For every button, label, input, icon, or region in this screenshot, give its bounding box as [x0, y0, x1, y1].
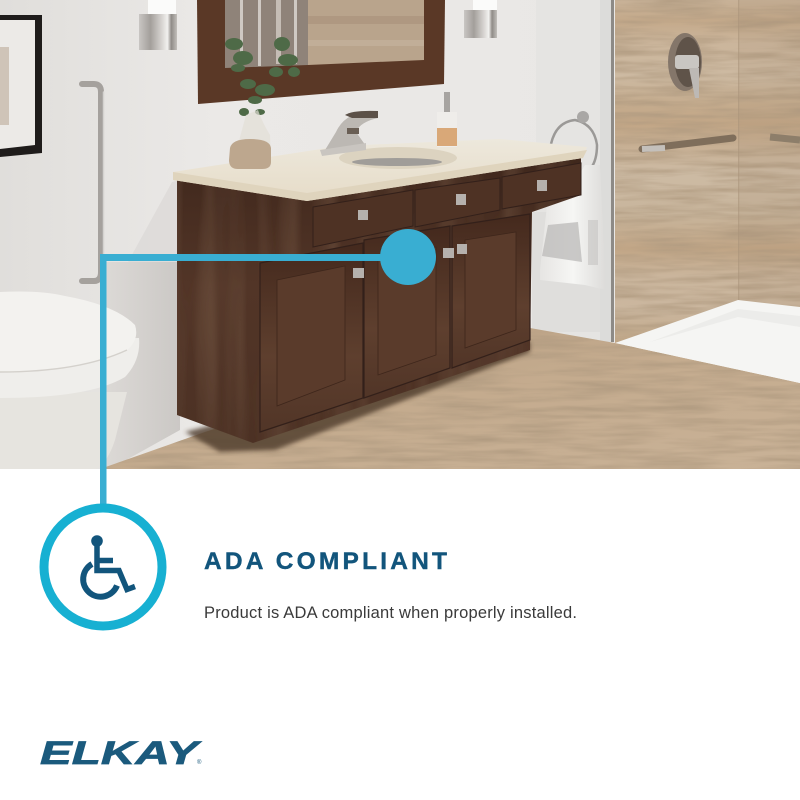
shower grab bars [642, 137, 800, 149]
vanity countertop [173, 139, 587, 201]
floor [100, 328, 800, 469]
towel ring [551, 111, 597, 168]
right wall sconce [464, 0, 497, 38]
cabinet body [177, 155, 581, 443]
drawer and door handles [353, 180, 547, 278]
shower valve [668, 33, 702, 98]
faucet [320, 111, 378, 156]
cabinet doors [260, 214, 530, 432]
mirror [197, 0, 445, 104]
framed picture [0, 15, 42, 157]
towel [542, 165, 598, 286]
plant in vase [225, 37, 300, 169]
sink [339, 147, 457, 169]
icon badge: wheelchair [44, 508, 162, 626]
description text: Product is ADA compliant when properly installed. [204, 604, 577, 622]
logo: Elkay: ® [197, 759, 202, 766]
logo: Elkay: ELKAY [40, 735, 202, 771]
toilet [0, 292, 139, 469]
icon: wheelchair user [83, 535, 135, 597]
heading: ADA COMPLIANT [204, 548, 447, 575]
soap dispenser [437, 92, 457, 147]
wall grab bar [82, 84, 104, 281]
vanity cabinet [177, 155, 581, 452]
callout connector line [100, 254, 390, 510]
shower tray [615, 300, 800, 383]
stone tile wall [615, 0, 800, 345]
left wall sconce [139, 0, 177, 50]
shower glass edge [600, 0, 614, 342]
back wall [0, 0, 615, 469]
logo: Elkay [40, 735, 202, 771]
door inset panels [277, 232, 516, 406]
cabinet drawers [313, 163, 581, 247]
callout hotspot dot [380, 229, 436, 285]
bathroom photo scene [0, 0, 800, 469]
cabinet shadow on floor [185, 342, 530, 452]
